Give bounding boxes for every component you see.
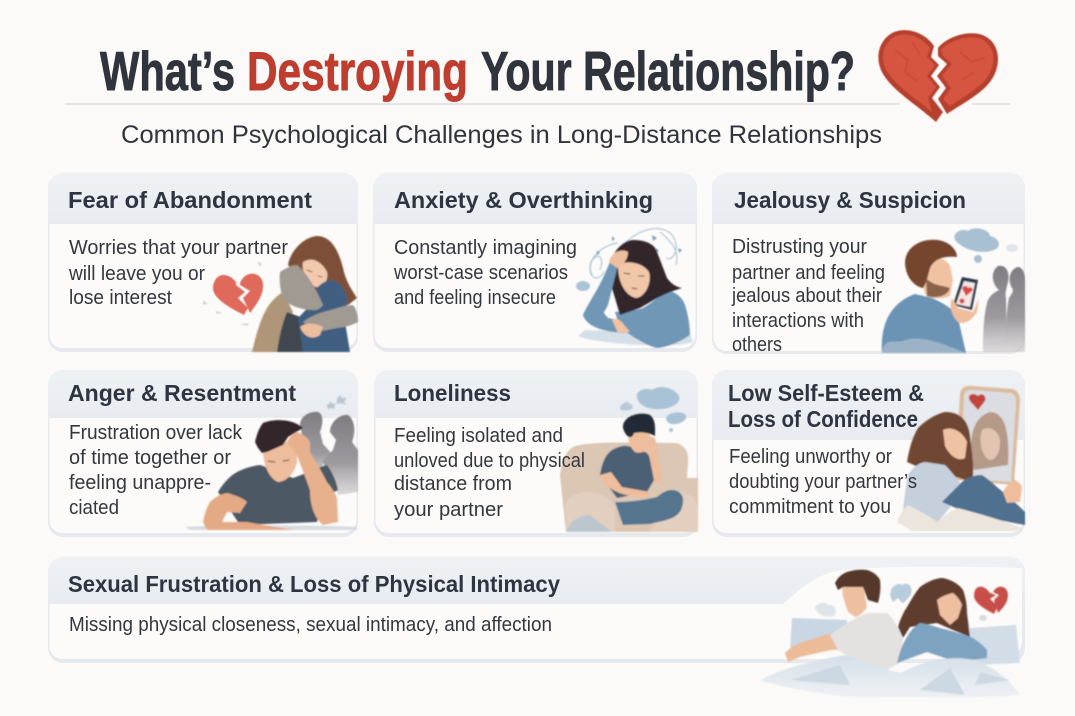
description [68, 237, 288, 309]
description: of time together or [69, 447, 231, 469]
description: feeling unappre- [69, 472, 211, 494]
description: unloved due to physical [394, 450, 585, 472]
title: Destroying [247, 40, 468, 102]
illustration: frustrated man with arguing silhouettes [185, 395, 358, 530]
description: worst-case scenarios [393, 262, 568, 284]
description: and feeling insecure [394, 287, 556, 309]
description: Distrusting your [732, 236, 867, 258]
description: Frustration over lack [69, 422, 243, 444]
description: your partner [394, 499, 503, 521]
description: Constantly imagining [394, 237, 577, 259]
illustration: woman with swirling thoughts [576, 229, 693, 348]
panel: Jealousy & Suspicion [48, 173, 1025, 698]
description: Feeling isolated and [394, 425, 563, 447]
illustration: couple back to back in bed [760, 570, 1020, 698]
description [731, 236, 885, 356]
description: ciated [69, 497, 119, 519]
description: distance from [394, 473, 512, 495]
heading: Low Self-Esteem & [728, 380, 924, 406]
icon: broken heart [878, 30, 998, 122]
panel: Low Self-Esteem & Loss of Confidence [48, 370, 1025, 698]
description: lose interest [69, 287, 172, 309]
description [393, 237, 577, 309]
heading: Loneliness [394, 380, 511, 406]
panel: Anger & Resentment [48, 370, 1025, 698]
panel: Sexual Frustration & Loss of Physical Intimacy [48, 557, 1025, 698]
description: doubting your partner’s [729, 471, 917, 493]
description: Missing physical closeness, sexual intimacy, and affection [69, 614, 552, 636]
description: Feeling unworthy or [729, 446, 892, 468]
description: jealous about their [731, 285, 882, 307]
heading: Jealousy & Suspicion [734, 187, 966, 213]
panel: Anxiety & Overthinking [48, 173, 1025, 698]
heading: Fear of Abandonment [68, 187, 312, 213]
heading: Anxiety & Overthinking [394, 187, 653, 213]
illustration: man with phone, silhouettes and thought cloud [882, 228, 1025, 353]
description [69, 422, 243, 519]
subtitle: Common Psychological Challenges in Long-Distance Relationships [121, 121, 882, 149]
illustration: lonely man on couch with clouds [560, 387, 698, 532]
heading: Loss of Confidence [728, 406, 918, 432]
title: What’s [100, 40, 235, 102]
description [394, 425, 585, 521]
description: Worries that your partner [69, 237, 288, 259]
heading [728, 380, 924, 432]
description: will leave you or [68, 263, 205, 285]
icon: small broken heart [203, 262, 263, 326]
title [100, 40, 855, 102]
panel: Fear of Abandonment [48, 173, 1025, 698]
title: Your Relationship? [481, 40, 855, 102]
illustration: woman hugging knees [252, 236, 358, 352]
heading: Anger & Resentment [68, 380, 296, 406]
description: interactions with [732, 310, 864, 332]
description [729, 446, 917, 518]
description: partner and feeling [732, 262, 885, 284]
heading: Sexual Frustration & Loss of Physical Intimacy [68, 571, 560, 597]
description: commitment to you [729, 496, 891, 518]
description: others [732, 334, 782, 356]
panel: Loneliness [48, 370, 1025, 698]
illustration: woman and mirror reflection [897, 386, 1025, 531]
